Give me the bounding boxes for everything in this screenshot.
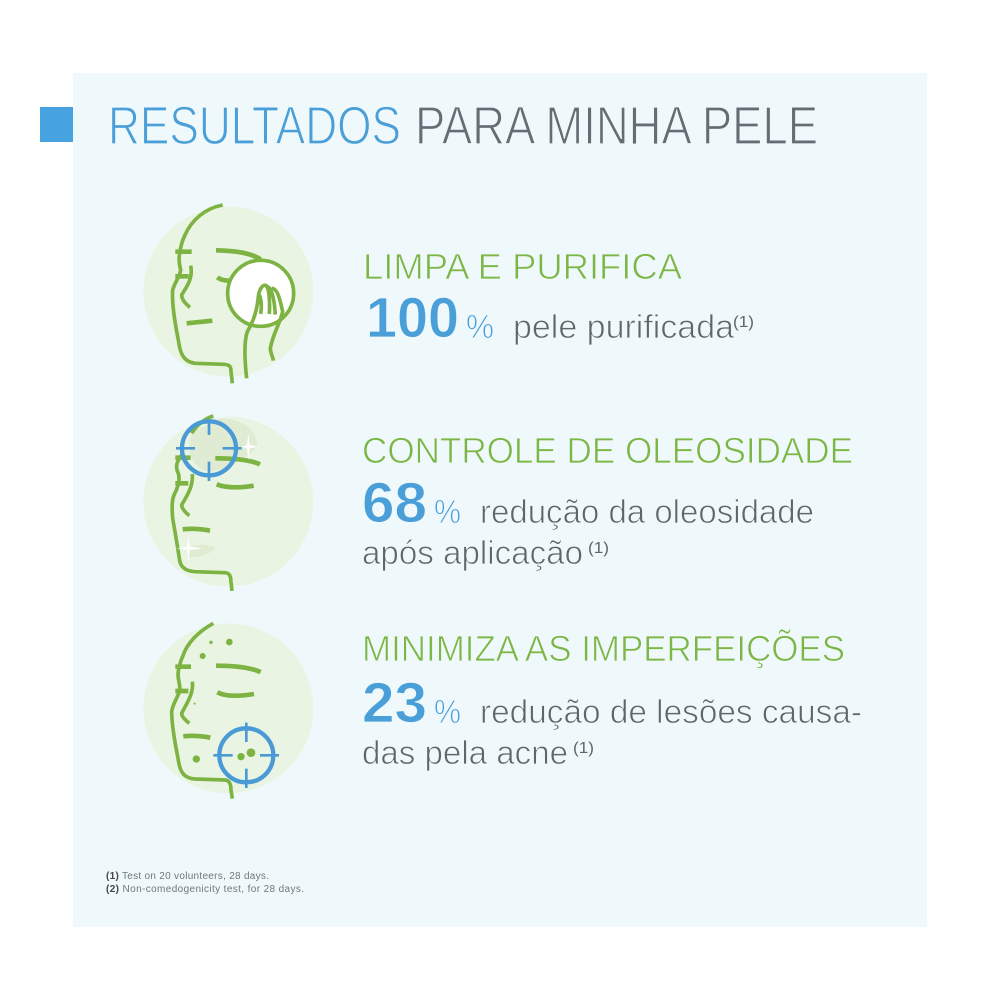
- background panel: [73, 73, 927, 927]
- title: PARA MINHA PELE: [415, 96, 818, 156]
- footnotes: (2) Non-comedogenicity test, for 28 days.: [106, 884, 304, 895]
- section: controle de oleosidade: 68: [362, 471, 427, 535]
- icon: face with cleansing pad: [143, 205, 313, 383]
- section: limpa e purifica: %: [466, 308, 494, 345]
- section: controle de oleosidade: [362, 430, 853, 571]
- section: limpa e purifica: LIMPA E PURIFICA: [363, 246, 682, 287]
- section: controle de oleosidade: %: [434, 493, 461, 530]
- title: [108, 96, 818, 156]
- section: controle de oleosidade: (1): [588, 540, 609, 557]
- section: controle de oleosidade: redução da oleosidade: [480, 493, 814, 530]
- title marker square: [40, 107, 73, 142]
- section: limpa e purifica: 100: [366, 286, 459, 350]
- section: limpa e purifica: [363, 246, 754, 350]
- section: minimiza as imperfeicoes: (1): [573, 740, 594, 757]
- section: controle de oleosidade: CONTROLE DE OLEOSIDADE: [362, 430, 853, 471]
- section: minimiza as imperfeicoes: redução de lesões causa-: [480, 693, 862, 730]
- section: minimiza as imperfeicoes: 23: [362, 671, 427, 735]
- footnotes: (1) Test on 20 volunteers, 28 days.: [106, 871, 269, 882]
- section: limpa e purifica: pele purificada: [513, 308, 735, 345]
- section: minimiza as imperfeicoes: das pela acne: [362, 734, 568, 771]
- icon: face with imperfections target: [143, 623, 313, 799]
- title: RESULTADOS: [108, 96, 401, 156]
- icon: face with oil target: [143, 416, 313, 591]
- footnotes: [106, 871, 304, 895]
- section: controle de oleosidade: após aplicação: [362, 534, 583, 571]
- section: minimiza as imperfeicoes: MINIMIZA AS IMPERFEIÇÕES: [362, 628, 845, 669]
- section: minimiza as imperfeicoes: %: [434, 693, 461, 730]
- section: minimiza as imperfeicoes: [362, 628, 862, 771]
- section: limpa e purifica: (1): [733, 314, 754, 331]
